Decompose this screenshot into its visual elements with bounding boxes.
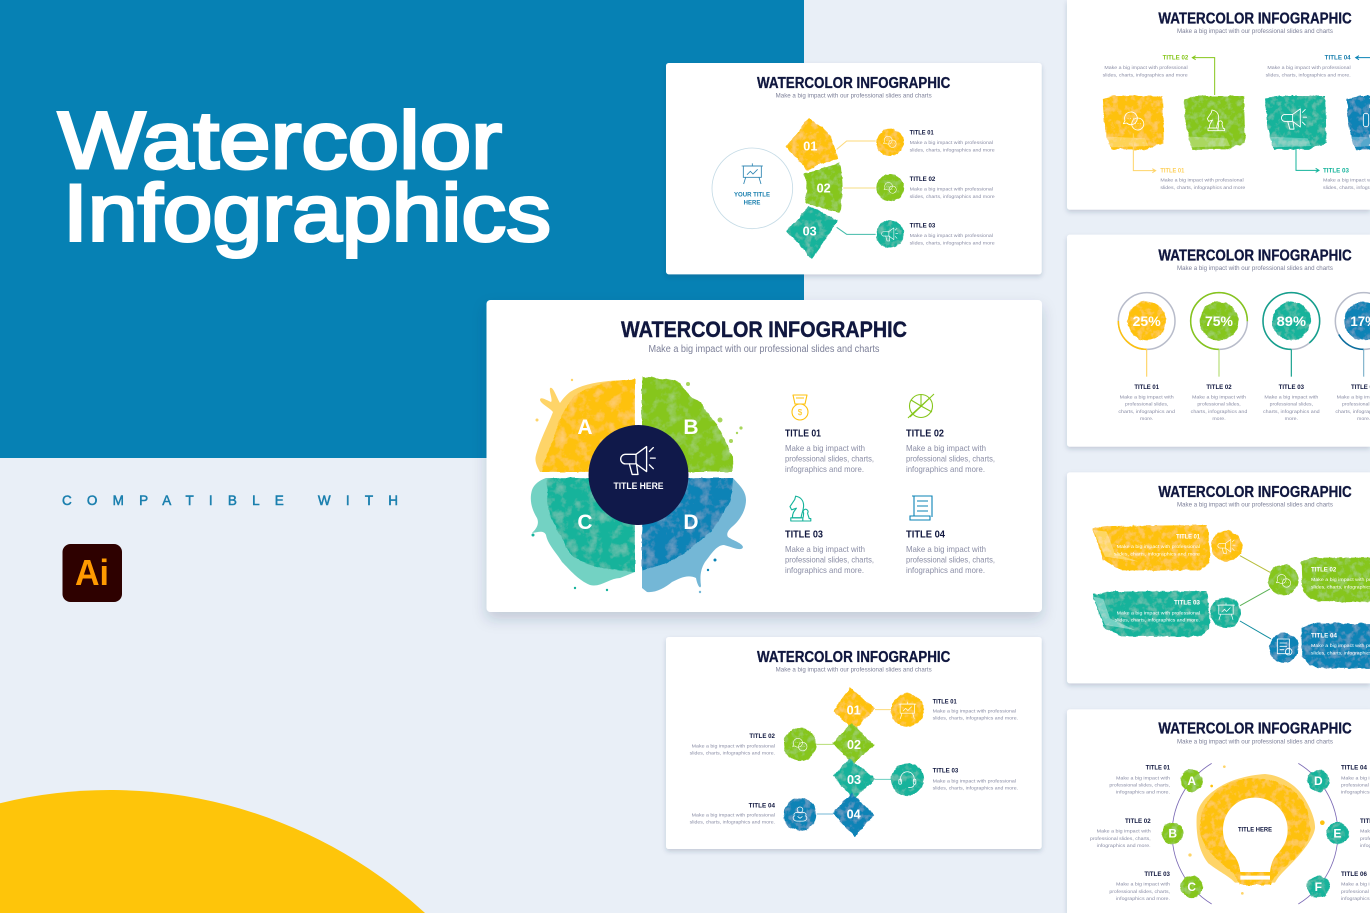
diamond 02 bbox=[832, 723, 874, 764]
item: title 04: professional slides, charts, bbox=[906, 554, 995, 564]
callout: title 03 bbox=[1296, 147, 1370, 191]
diamond 03: 03 bbox=[847, 773, 861, 787]
ring 89%: 89% bbox=[1277, 313, 1307, 329]
node E: E bbox=[1333, 827, 1341, 841]
text: title 03: infographics and more. bbox=[1116, 896, 1170, 902]
item 02: Make a big impact with professional bbox=[692, 743, 775, 749]
center hub bbox=[588, 425, 688, 525]
blob: teal board bbox=[1210, 597, 1241, 628]
ring 25% bbox=[1118, 293, 1175, 422]
quadrant D bbox=[642, 478, 746, 593]
quadrant B: B bbox=[683, 416, 699, 439]
blob: yellow megaphone bbox=[1211, 531, 1242, 561]
text: title 01: Make a big impact with bbox=[1116, 775, 1170, 781]
item: title 01: infographics and more. bbox=[785, 464, 864, 474]
item 03: slides, charts, infographics and more bbox=[910, 240, 995, 246]
item: title 02: TITLE 02 bbox=[906, 428, 944, 440]
subheading: Make a big impact with our professional slides and charts bbox=[1177, 502, 1333, 509]
item 01: Make a big impact with professional bbox=[933, 709, 1016, 715]
segment 02: 02 bbox=[817, 182, 831, 196]
panel: brush stroke tree card bbox=[1067, 472, 1370, 683]
item: title 04: infographics and more. bbox=[906, 565, 985, 575]
node F bbox=[1307, 876, 1329, 898]
subheading: Make a big impact with our professional slides and charts bbox=[776, 93, 932, 100]
ring 25%: TITLE 01 bbox=[1134, 385, 1160, 391]
quadrant B bbox=[642, 377, 743, 472]
callout: title 04: slides, charts, infographics and more. bbox=[1266, 72, 1351, 78]
card background bbox=[666, 637, 1042, 849]
item 02: Make a big impact with professional bbox=[910, 187, 993, 193]
diamond 02: 02 bbox=[847, 738, 861, 752]
item: title 03: infographics and more. bbox=[785, 565, 864, 575]
item 03 bbox=[876, 221, 995, 248]
subheading: Make a big impact with our professional slides and charts bbox=[1177, 265, 1333, 272]
card background bbox=[666, 63, 1042, 274]
bulb illustration: TITLE HERE bbox=[1238, 827, 1272, 834]
item 03: TITLE 03 bbox=[910, 223, 936, 229]
ring 89%: Make a big impact with bbox=[1264, 395, 1319, 401]
item: title 03: Make a big impact with bbox=[785, 544, 865, 554]
item 01: slides, charts, infographics and more. bbox=[933, 716, 1018, 722]
text: title 06 bbox=[1341, 872, 1370, 902]
main title: Infographics bbox=[63, 168, 551, 258]
node A bbox=[1181, 770, 1203, 792]
item: title 04: TITLE 04 bbox=[906, 530, 945, 540]
brush: title 03: TITLE 03 bbox=[1174, 601, 1201, 607]
main title bbox=[58, 96, 551, 258]
ring 25%: 25% bbox=[1133, 313, 1161, 329]
text: title 03 bbox=[1109, 872, 1171, 902]
connectors bbox=[1240, 556, 1271, 639]
brush: title 04: TITLE 04 bbox=[1311, 633, 1338, 639]
item: title 01: professional slides, charts, bbox=[785, 454, 874, 464]
panel: three step card bbox=[666, 63, 1042, 274]
brush: title 02: TITLE 02 bbox=[1311, 567, 1337, 573]
brush: title 02 bbox=[1301, 558, 1370, 602]
quadrant A: A bbox=[577, 416, 593, 439]
heading: WATERCOLOR INFOGRAPHIC bbox=[621, 317, 907, 342]
brush square: green bbox=[1184, 96, 1245, 149]
heading: WATERCOLOR INFOGRAPHIC bbox=[757, 649, 950, 666]
item 02: TITLE 02 bbox=[749, 734, 776, 740]
ring 17% bbox=[1335, 293, 1370, 422]
ring 75% bbox=[1191, 293, 1248, 422]
brush square: teal bbox=[1265, 96, 1326, 149]
connectors bbox=[837, 141, 876, 234]
item: title 01: $ bbox=[798, 408, 803, 417]
callout: title 04: Make a big impact with professional bbox=[1267, 65, 1351, 71]
item 02: TITLE 02 bbox=[910, 177, 936, 183]
text: title 02: Make a big impact with bbox=[1097, 829, 1151, 835]
ring 89%: more. bbox=[1285, 416, 1298, 422]
item: title 02: professional slides, charts, bbox=[906, 454, 995, 464]
segment 03 bbox=[786, 206, 838, 259]
text: title 01: professional slides, charts, bbox=[1109, 783, 1170, 789]
segment 01: 01 bbox=[803, 140, 817, 154]
diamond 04 bbox=[832, 793, 874, 837]
ring 75%: Make a big impact with bbox=[1192, 395, 1246, 401]
panel: percentage rings card bbox=[1067, 235, 1370, 447]
center circle bbox=[712, 148, 793, 229]
subheading: Make a big impact with our professional slides and charts bbox=[1177, 739, 1333, 746]
text: title 02 bbox=[1090, 819, 1151, 849]
node E bbox=[1326, 822, 1348, 844]
ring 89%: charts, infographics and bbox=[1263, 409, 1320, 415]
ring 75%: TITLE 02 bbox=[1206, 385, 1232, 391]
item: title 02: Make a big impact with bbox=[906, 443, 986, 453]
ring 75%: more. bbox=[1212, 416, 1226, 422]
panel: light bulb card bbox=[1067, 709, 1370, 913]
blob: blue document bbox=[1269, 633, 1299, 662]
item 01: TITLE 01 bbox=[910, 130, 934, 136]
heading: WATERCOLOR INFOGRAPHIC bbox=[757, 75, 950, 92]
node C: C bbox=[1187, 880, 1196, 894]
callout: title 04: TITLE 04 bbox=[1325, 56, 1351, 62]
ring 75%: professional slides, bbox=[1197, 402, 1241, 408]
brush: title 04 bbox=[1301, 624, 1370, 668]
text: title 06: TITLE 06 bbox=[1341, 872, 1368, 878]
ring 25%: charts, infographics and bbox=[1118, 409, 1175, 415]
diamond 03 bbox=[833, 758, 876, 800]
ring 75%: 75% bbox=[1205, 313, 1234, 329]
callout: title 04 bbox=[1266, 56, 1370, 78]
text: title 01: infographics and more. bbox=[1116, 790, 1170, 796]
card background bbox=[1067, 709, 1370, 913]
item 01: Make a big impact with professional bbox=[910, 140, 993, 146]
text: title 02: TITLE 02 bbox=[1125, 819, 1151, 825]
text: title 02: infographics and more. bbox=[1097, 843, 1151, 849]
item 02 bbox=[690, 728, 816, 761]
segment 03: 03 bbox=[803, 224, 817, 238]
item 03: slides, charts, infographics and more. bbox=[933, 785, 1018, 791]
item 04: slides, charts, infographics and more. bbox=[690, 820, 775, 826]
quadrant C bbox=[531, 478, 635, 591]
diamond 04: 04 bbox=[847, 808, 861, 822]
orbit arcs bbox=[1172, 763, 1338, 904]
quadrant A bbox=[535, 379, 635, 472]
item: title 03: TITLE 03 bbox=[785, 530, 823, 540]
card background bbox=[1067, 0, 1370, 210]
ring 25%: Make a big impact with bbox=[1120, 395, 1174, 401]
text: title 01: TITLE 01 bbox=[1146, 766, 1171, 772]
item: title 04 bbox=[906, 496, 995, 575]
text: title 03: TITLE 03 bbox=[1144, 872, 1171, 878]
node D bbox=[1307, 770, 1329, 792]
panel: four square brushes card bbox=[1067, 0, 1370, 210]
brush: title 01: slides, charts, infographics and more bbox=[1114, 551, 1200, 557]
diamond 01 bbox=[833, 687, 876, 731]
item: title 03: professional slides, charts, bbox=[785, 554, 874, 564]
item 04 bbox=[690, 798, 816, 831]
item 03: Make a big impact with professional bbox=[933, 778, 1016, 784]
ring 25%: professional slides, bbox=[1125, 402, 1168, 408]
callout: title 01 bbox=[1133, 133, 1246, 191]
yellow corner arc bbox=[0, 790, 425, 913]
node F: F bbox=[1315, 880, 1322, 894]
callout: title 01: slides, charts, infographics and more bbox=[1160, 185, 1246, 191]
callout: title 02: Make a big impact with professional bbox=[1104, 65, 1188, 71]
item 03: TITLE 03 bbox=[933, 769, 959, 775]
text: title 03: Make a big impact with bbox=[1116, 882, 1170, 888]
subheading: Make a big impact with our professional slides and charts bbox=[648, 344, 880, 355]
item 04: Make a big impact with professional bbox=[692, 813, 775, 819]
item 02: slides, charts, infographics and more bbox=[910, 194, 995, 200]
text: title 01 bbox=[1109, 766, 1171, 796]
ring 25%: more. bbox=[1140, 416, 1153, 422]
callout: title 02 bbox=[1103, 56, 1215, 95]
quadrant C: C bbox=[577, 511, 593, 534]
connectors bbox=[817, 710, 892, 814]
item: title 02: infographics and more. bbox=[906, 464, 985, 474]
item 01: slides, charts, infographics and more bbox=[910, 147, 995, 153]
blob: green chat bbox=[1268, 565, 1299, 595]
callout: title 02: TITLE 02 bbox=[1163, 56, 1189, 62]
icon: adobe illustrator: Ai bbox=[75, 552, 109, 593]
text: title 04: TITLE 04 bbox=[1341, 766, 1368, 772]
node B: B bbox=[1168, 827, 1177, 841]
brush: title 03: Make a big impact with professional bbox=[1117, 610, 1200, 616]
text: title 03: professional slides, charts, bbox=[1109, 889, 1170, 895]
callout: title 01: TITLE 01 bbox=[1160, 168, 1185, 174]
panel: main splash card bbox=[486, 300, 1042, 612]
node C bbox=[1181, 876, 1203, 898]
item: title 02 bbox=[906, 394, 995, 474]
panel: diamond steps card bbox=[666, 637, 1042, 849]
center circle: YOUR TITLE bbox=[734, 191, 770, 198]
item 03: Make a big impact with professional bbox=[910, 233, 993, 239]
callout: title 03: TITLE 03 bbox=[1323, 168, 1350, 174]
subheading: Make a big impact with our professional slides and charts bbox=[776, 667, 932, 674]
card background bbox=[1067, 472, 1370, 683]
item 03 bbox=[891, 763, 1018, 796]
diamond 01: 01 bbox=[847, 704, 861, 718]
icon: adobe illustrator bbox=[62, 544, 122, 602]
ring 75%: charts, infographics and bbox=[1191, 409, 1248, 415]
item 01 bbox=[891, 694, 1018, 726]
node A: A bbox=[1187, 774, 1196, 788]
center hub: TITLE HERE bbox=[614, 481, 664, 492]
item: title 01 bbox=[785, 395, 874, 474]
segment 02 bbox=[804, 162, 843, 213]
item 01 bbox=[876, 129, 995, 156]
center circle: HERE bbox=[744, 199, 760, 206]
quadrant D: D bbox=[683, 511, 699, 534]
brush: title 01: TITLE 01 bbox=[1176, 534, 1201, 540]
segment 01 bbox=[786, 118, 838, 170]
ring 89% bbox=[1263, 293, 1320, 422]
callout: title 01: Make a big impact with professional bbox=[1160, 178, 1244, 184]
ring 89%: TITLE 03 bbox=[1279, 385, 1305, 391]
bulb illustration bbox=[1188, 765, 1325, 895]
subheading: Make a big impact with our professional slides and charts bbox=[1177, 28, 1333, 35]
node B bbox=[1162, 822, 1184, 844]
item: title 03 bbox=[785, 496, 874, 575]
node D: D bbox=[1314, 774, 1323, 788]
brush: title 01 bbox=[1092, 525, 1209, 570]
brush: title 01: Make a big impact with professional bbox=[1117, 544, 1200, 550]
item 04: TITLE 04 bbox=[749, 803, 776, 809]
brush square: yellow bbox=[1102, 96, 1164, 149]
item 02 bbox=[876, 174, 995, 201]
ring 89%: professional slides, bbox=[1270, 402, 1313, 408]
callout: title 02: slides, charts, infographics and more bbox=[1103, 72, 1188, 78]
compatible with label: COMPATIBLE WITH bbox=[62, 493, 398, 508]
ring 17%: more. bbox=[1357, 416, 1370, 422]
card background bbox=[486, 300, 1042, 612]
card background bbox=[1067, 235, 1370, 447]
item: title 04: Make a big impact with bbox=[906, 544, 986, 554]
brush: title 03 bbox=[1092, 591, 1209, 636]
item 01: TITLE 01 bbox=[933, 699, 957, 705]
text: title 05 bbox=[1360, 819, 1370, 849]
text: title 02: professional slides, charts, bbox=[1090, 836, 1151, 842]
brush square: blue bbox=[1346, 96, 1370, 149]
blue header block bbox=[0, 0, 804, 458]
main title: Watercolor bbox=[58, 96, 502, 186]
item: title 01: Make a big impact with bbox=[785, 443, 865, 453]
item: title 01: TITLE 01 bbox=[785, 428, 821, 440]
item 02: slides, charts, infographics and more. bbox=[690, 750, 775, 756]
text: title 04 bbox=[1341, 766, 1370, 796]
brush: title 03: slides, charts, infographics and more. bbox=[1115, 618, 1200, 624]
